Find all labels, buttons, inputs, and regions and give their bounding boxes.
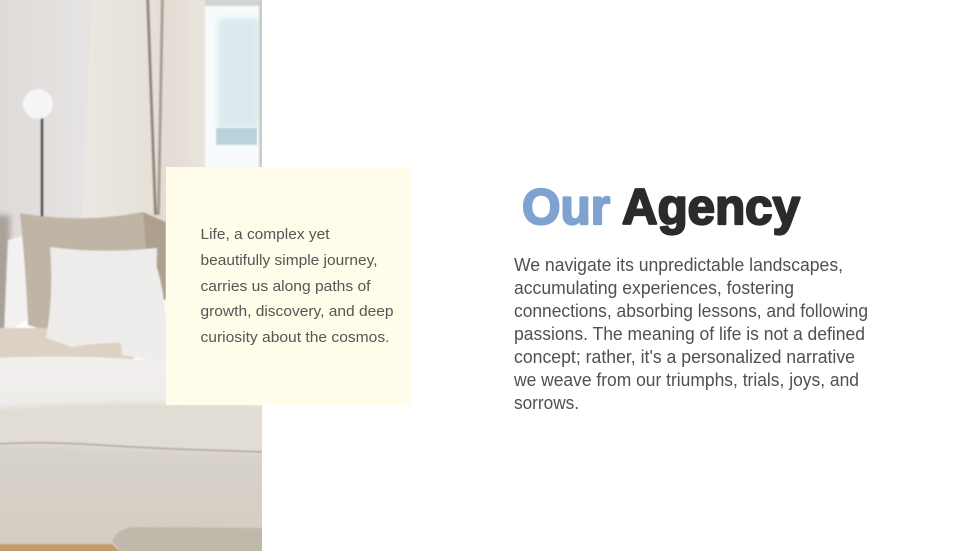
linen pillow rear [143, 212, 166, 300]
wall [0, 0, 92, 240]
white front pillow [46, 247, 157, 347]
body paragraph: sorrows. [514, 393, 579, 413]
title [522, 179, 800, 235]
yellow text card [166, 167, 411, 405]
body paragraph: accumulating experiences, fostering [514, 278, 794, 298]
wall lamp [23, 89, 53, 218]
body paragraph: concept; rather, it's a personalized narrative [514, 347, 855, 367]
headboard shadow [0, 215, 10, 360]
card text: curiosity about the cosmos. [200, 329, 390, 346]
bed base [0, 444, 262, 551]
linen pillow [20, 212, 156, 333]
body paragraph [513, 255, 868, 413]
card text [200, 226, 394, 346]
white side pillow [120, 267, 166, 362]
title: Our [522, 179, 610, 235]
card text: Life, a complex yet [200, 226, 330, 243]
duvet beige band [0, 402, 268, 454]
card text: growth, discovery, and deep [200, 303, 394, 320]
white back pillow [4, 234, 27, 334]
throw blanket [112, 527, 268, 551]
title: Agency [622, 179, 800, 235]
wooden floor [0, 544, 125, 551]
body paragraph: we weave from our triumphs, trials, joys, and [513, 370, 859, 390]
duvet fold line [0, 443, 268, 452]
body paragraph: passions. The meaning of life is not a defined [514, 324, 865, 344]
body paragraph: connections, absorbing lessons, and following [514, 301, 868, 321]
card text: carries us along paths of [200, 278, 371, 295]
photo: bedroom interior [0, 0, 268, 551]
curtain [103, 0, 206, 224]
duvet [0, 356, 262, 408]
mattress top [0, 328, 134, 364]
body paragraph: We navigate its unpredictable landscapes, [514, 255, 843, 275]
card text: beautifully simple journey, [200, 252, 378, 269]
window [204, 0, 262, 167]
